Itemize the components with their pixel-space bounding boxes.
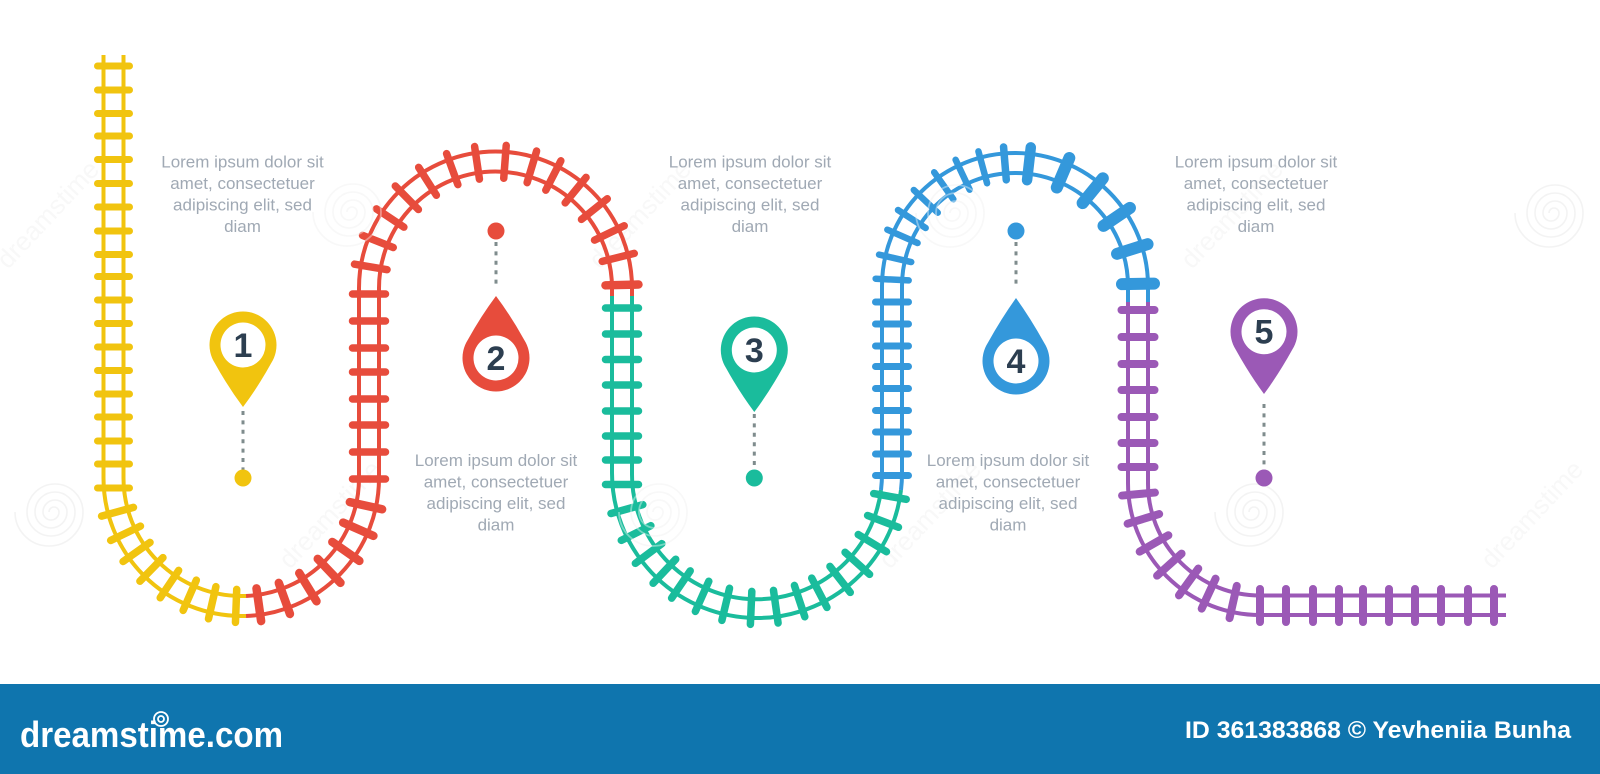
marker 4: inverted drop with dotted stem bbox=[982, 222, 1050, 394]
marker 5: pin with dotted stem bbox=[1230, 298, 1298, 486]
text block 3: amet, consectetuer bbox=[678, 174, 823, 193]
text block 4: diam bbox=[990, 516, 1026, 534]
text block 5: adipiscing elit, sed bbox=[1187, 196, 1325, 214]
watermark spirals and diagonal marks: dreamstime bbox=[1174, 154, 1289, 274]
text block 5: diam bbox=[1238, 217, 1274, 236]
watermark spirals and diagonal marks: dreamstime bbox=[582, 154, 697, 274]
footer logo text: dreamstime.com bbox=[20, 714, 283, 755]
marker 5: pin with dotted stem: 5 bbox=[1255, 314, 1273, 352]
text block 4: adipiscing elit, sed bbox=[939, 494, 1077, 513]
watermark spirals and diagonal marks bbox=[0, 154, 1589, 574]
watermark spirals and diagonal marks: dreamstime bbox=[872, 454, 987, 574]
watermark spirals and diagonal marks: dreamstime bbox=[1474, 454, 1589, 574]
text block 2: diam bbox=[478, 516, 514, 534]
marker 3: pin with dotted stem bbox=[721, 317, 788, 486]
text block 1: diam bbox=[224, 217, 261, 236]
footer credit: ID 361383868 © Yevheniia Bunha bbox=[1185, 717, 1572, 744]
text block 1: amet, consectetuer bbox=[170, 174, 315, 193]
text block 1: Lorem ipsum dolor sit bbox=[161, 152, 324, 172]
track segment: red bbox=[246, 145, 638, 621]
track segment: purple bbox=[1122, 302, 1506, 622]
watermark spirals and diagonal marks: dreamstime bbox=[272, 454, 387, 574]
text block 2: amet, consectetuer bbox=[424, 472, 569, 492]
text block 4: Lorem ipsum dolor sit bbox=[927, 451, 1090, 470]
watermark overlay on track bbox=[313, 184, 984, 546]
marker 1: pin with dotted stem: 1 bbox=[234, 327, 252, 365]
text block 3: adipiscing elit, sed bbox=[681, 196, 819, 214]
track segment: blue bbox=[876, 147, 1154, 490]
text block 5: Lorem ipsum dolor sit bbox=[1175, 152, 1338, 172]
text block 5: amet, consectetuer bbox=[1184, 174, 1329, 193]
text block 3: diam bbox=[732, 217, 768, 236]
text block 2: adipiscing elit, sed bbox=[427, 494, 565, 513]
footer logo spiral icon bbox=[154, 712, 168, 726]
marker 2: inverted drop with dotted stem: 2 bbox=[487, 340, 505, 378]
track segment: yellow bbox=[98, 55, 246, 622]
marker 3: pin with dotted stem: 3 bbox=[745, 332, 764, 370]
text block 2: Lorem ipsum dolor sit bbox=[415, 451, 578, 470]
text block 4: amet, consectetuer bbox=[936, 472, 1081, 492]
marker 4: inverted drop with dotted stem: 4 bbox=[1007, 343, 1026, 381]
text block 3: Lorem ipsum dolor sit bbox=[669, 152, 832, 172]
text block 1: adipiscing elit, sed bbox=[173, 196, 312, 214]
railway track bbox=[98, 55, 1506, 624]
track segment: green bbox=[606, 296, 906, 624]
marker 2: inverted drop with dotted stem bbox=[462, 222, 530, 391]
footer bar bbox=[0, 684, 1600, 774]
marker 1: pin with dotted stem bbox=[210, 312, 276, 486]
